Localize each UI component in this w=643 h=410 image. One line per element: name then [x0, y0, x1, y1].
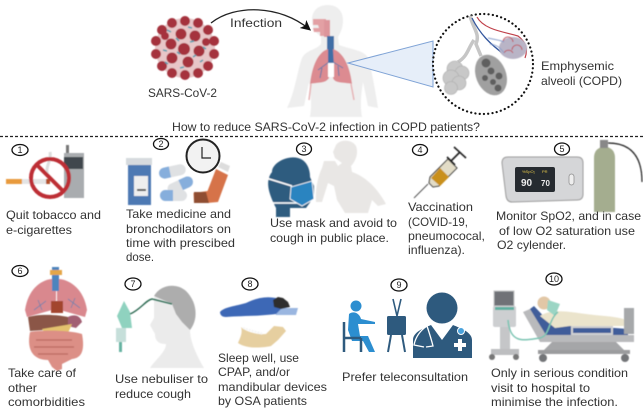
panel: step 5: of low O2 saturation use [499, 224, 635, 238]
panel: step 8: CPAP, and/or [218, 365, 290, 379]
icon: nebuliser mask [116, 299, 172, 352]
panel: infection overview [148, 5, 622, 117]
panel: step 7 [115, 278, 208, 401]
number badge 10: 10 [549, 274, 559, 284]
icon: capsules [158, 163, 195, 201]
icon: mandibular bone [238, 326, 286, 348]
icon: inhaler [194, 162, 230, 203]
icon: ventilator [489, 291, 519, 360]
icon: blood vessels [472, 18, 505, 55]
panel: step 8: mandibular devices [218, 380, 327, 394]
zoom cone [348, 41, 433, 87]
label: infection: Infection [230, 16, 282, 30]
number badge 3: 3 [301, 144, 307, 154]
number badge 5 [554, 143, 570, 155]
panel: step 6 [8, 266, 87, 409]
icon: sleeping person [220, 297, 298, 317]
icon: coughing man [316, 141, 386, 213]
arrow: infection [211, 10, 309, 29]
panel: step 5: O2 cylender. [497, 238, 566, 252]
oximeter screen: 90 [521, 178, 533, 189]
oximeter screen: 70 [541, 179, 550, 188]
icon: doctor [413, 292, 472, 358]
text: Only in serious condition [491, 366, 628, 380]
panel: step 4 [408, 144, 485, 257]
text: Use mask and avoid to [270, 216, 397, 230]
text: Prefer teleconsultation [342, 370, 468, 384]
icon: medicine bottle [126, 158, 152, 205]
text: Vaccination [408, 200, 473, 214]
panel: step 3: cough in public place. [270, 231, 389, 245]
panel: step 8 [218, 278, 327, 408]
text: Use nebuliser to [115, 372, 208, 386]
panel: step 4: influenza). [408, 243, 465, 257]
panel: infection overview: alveoli (COPD) [541, 74, 622, 88]
icon: television [387, 299, 406, 352]
number badge 6: 6 [17, 266, 23, 276]
panel: step 10: minimise the infection. [491, 395, 618, 409]
oximeter screen: PR [542, 169, 548, 174]
icon: pulse oximeter [502, 157, 583, 202]
number badge 8: 8 [247, 279, 253, 289]
number badge 6 [12, 266, 28, 276]
icon: hospital bed with patient [508, 296, 634, 362]
panel: step 2: bronchodilators on [126, 222, 231, 236]
icon: human torso with lungs [287, 5, 378, 117]
text: Quit tobacco and [6, 208, 101, 222]
icon: syringe [414, 147, 466, 198]
number badge 5: 5 [559, 144, 565, 154]
icon: clock [186, 140, 220, 172]
panel: step 6: comorbidities [8, 395, 85, 409]
number badge 10 [546, 273, 562, 285]
number badge 2: 2 [158, 139, 164, 149]
panel: step 9 [342, 279, 472, 384]
panel: step 10: visit to hospital to [491, 381, 590, 395]
panel: step 1: e-cigarettes [6, 223, 72, 237]
icon: head profile [150, 286, 204, 368]
panel: step 4: (COVID-19, [408, 215, 468, 229]
dotted circle [433, 14, 533, 114]
number badge 7: 7 [130, 279, 136, 289]
icon: SARS-CoV-2 virus [151, 16, 219, 80]
panel: step 2: time with prescibed [126, 236, 235, 250]
heading: How to reduce SARS-CoV-2 infection in COPD patients? [172, 120, 480, 134]
panel: step 1 [6, 144, 101, 237]
icon: bronchi [458, 16, 481, 62]
icon: seated patient [344, 300, 375, 352]
icon: no tobacco [6, 145, 84, 198]
number badge 1: 1 [17, 145, 23, 155]
panel: step 3 [266, 141, 397, 245]
panel: step 2 [126, 138, 235, 264]
panel: step 6: other [8, 381, 37, 395]
number badge 4: 4 [417, 145, 423, 155]
icon: oxygen cylinder [594, 140, 642, 212]
label: emphysemic alveoli: Emphysemic [541, 59, 614, 73]
panel: step 5 [496, 140, 642, 252]
text: Monitor SpO2, and in case [496, 209, 641, 223]
number badge 9: 9 [396, 280, 402, 290]
panel: step 8: by OSA patients [218, 394, 307, 408]
callout: alveoli [433, 14, 533, 114]
text: Take medicine and [126, 207, 231, 221]
panel: step 7: reduce cough [115, 387, 191, 401]
icon: internal organs [25, 267, 87, 371]
oximeter screen [515, 167, 574, 192]
icon: emphysematous alveoli [469, 50, 513, 100]
oximeter screen: %SpO₂ [522, 169, 536, 174]
panel: step 4: pneumococal, [408, 229, 485, 243]
panel: step 2: dose. [126, 250, 154, 264]
icon: mask head [266, 157, 314, 217]
label: SARS-CoV-2: SARS-CoV-2 [148, 86, 217, 100]
text: Sleep well, use [218, 351, 299, 365]
text: Take care of [8, 366, 77, 380]
icon: vascularised alveoli [488, 37, 527, 59]
icon: healthy alveoli [443, 61, 469, 94]
panel: step 10 [489, 273, 634, 409]
